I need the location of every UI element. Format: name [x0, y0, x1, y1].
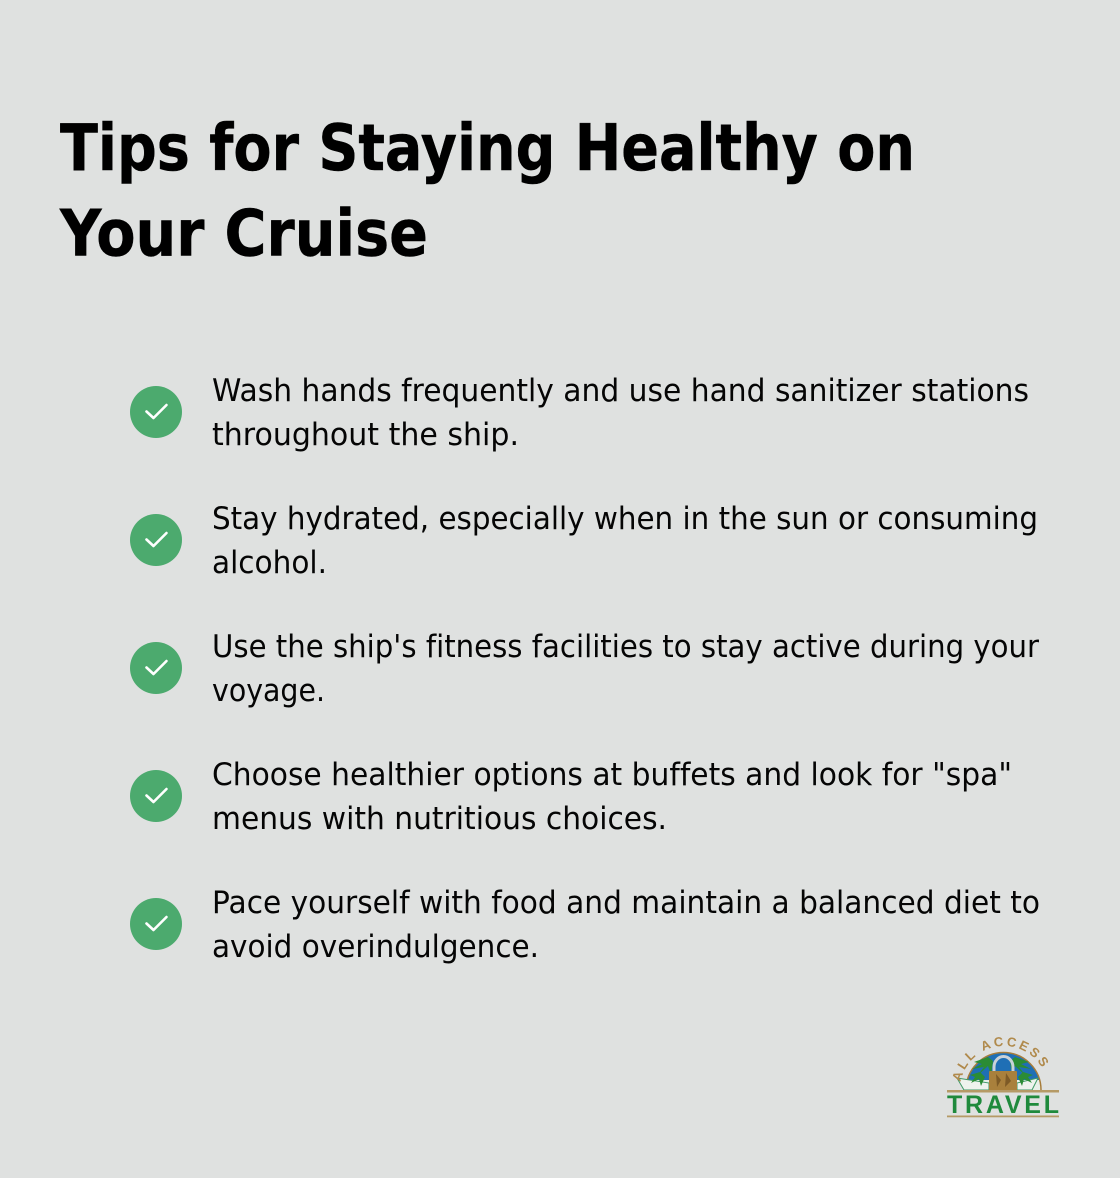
title [59, 112, 915, 272]
logo arched text: ALL ACCESS [952, 1037, 1048, 1082]
logo boats [957, 1078, 1038, 1090]
tip 2: hydration: alcohol. [212, 545, 327, 581]
title: Tips for Staying Healthy on [60, 112, 915, 186]
tip 5: balanced diet: avoid overindulgence. [212, 929, 539, 965]
logo palms [970, 1057, 1033, 1086]
tip 2: hydration [130, 501, 1038, 581]
tip 1: hand washing: Wash hands frequently and use hand sanitizer stations [212, 373, 1029, 409]
tip 5: balanced diet: Pace yourself with food and maintain a balanced diet to [212, 885, 1040, 921]
logo dome [968, 1053, 1040, 1090]
checklist [130, 373, 1040, 965]
logo padlock [994, 1056, 1013, 1072]
tip 4: healthy options: menus with nutritious choices. [212, 801, 667, 837]
logo wordmark: TRAVEL [947, 1091, 1059, 1119]
tip 3: fitness [130, 629, 1039, 709]
tip 3: fitness: voyage. [212, 673, 325, 709]
tip 1: hand washing: throughout the ship. [212, 417, 519, 453]
logo: All Access Travel [947, 1037, 1059, 1119]
tip 4: healthy options: Choose healthier options at buffets and look for "spa" [212, 757, 1012, 793]
logo rules [947, 1090, 1059, 1092]
tip 5: balanced diet [130, 885, 1040, 965]
tip 4: healthy options [130, 757, 1012, 837]
tip 1: hand washing [130, 373, 1029, 453]
title: Your Cruise [59, 198, 428, 272]
tip 3: fitness: Use the ship's fitness facilities to stay active during your [212, 629, 1039, 665]
tip 2: hydration: Stay hydrated, especially when in the sun or consuming [212, 501, 1038, 537]
